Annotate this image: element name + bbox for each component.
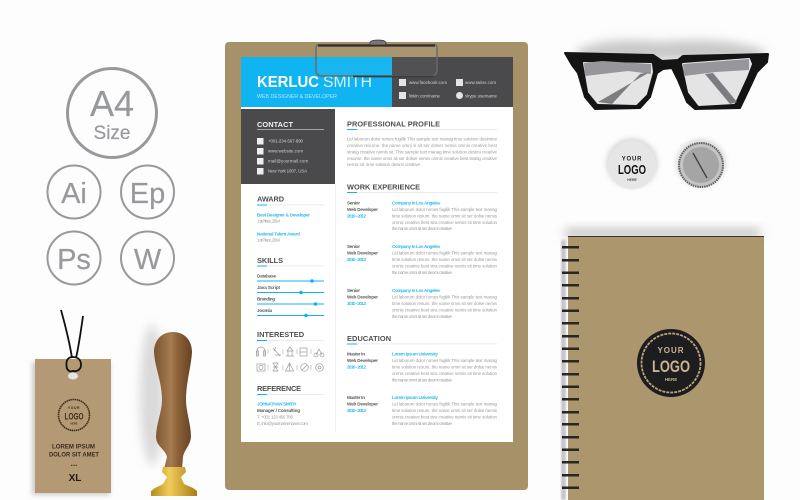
professional profile: Lid laborum dolor rumes fugilik This sample text manag time solution desimine: [347, 136, 497, 142]
work experience: WORK EXPERIENCE: [347, 182, 421, 192]
tag text: XL: [69, 473, 81, 484]
icon: Ps format: Ps: [57, 244, 91, 276]
degree 1: the name omni sit ser deomi creative: [392, 378, 452, 382]
icon: Ep format: Ep: [130, 178, 165, 210]
interests section: [256, 330, 324, 371]
contact panel: mail@yourmail.com: [268, 158, 308, 164]
tag text: LOREM IPSUM: [52, 444, 95, 450]
resume header: social links: www.twiter.com: [465, 80, 496, 85]
resume header: social links: linkin.com/name: [409, 94, 441, 98]
job 1: the name omni sit ser deomi creative: [392, 226, 452, 231]
clipboard: [225, 40, 528, 490]
degree 2: Lorem Ipsum University: [392, 395, 438, 400]
reference section: [257, 384, 324, 426]
icon: Ep format: [121, 166, 174, 218]
job 2: Web Developer: [347, 250, 378, 256]
job 2: Company In Los Angeles: [392, 244, 440, 249]
spiral binding: [562, 246, 579, 489]
badge: your logo: LOGO: [618, 162, 646, 177]
icon: W format: W: [134, 244, 162, 276]
notebook logo: [637, 329, 705, 397]
skills section: [257, 256, 324, 317]
tag logo: LOGO: [64, 412, 84, 422]
reference section: T. +001 123 456 789: [257, 414, 293, 420]
job 1: Senior: [347, 200, 360, 206]
skills section: SKILLS: [257, 256, 284, 265]
job 1: 2010 - 2012: [347, 214, 366, 218]
job 1: omnis creative best stra creative nemis sit time solution: [392, 220, 497, 225]
award section: Best Designer & Developer: [257, 212, 310, 218]
job 2: omnis creative best stra creative nemis sit time solution: [392, 264, 497, 268]
job 1: time solution resum. the name omni sit ser dolse nemis: [392, 214, 498, 218]
resume header: name: SMITH: [323, 74, 372, 91]
left lens: [584, 61, 652, 104]
job 3: Lid laborum dolor rumes fugilik This sample text manag: [392, 294, 497, 300]
notebook logo: YOUR: [657, 346, 685, 355]
glasses: [565, 40, 768, 109]
skills section: Database: [257, 274, 276, 278]
badge: your logo: [606, 138, 658, 189]
job 1: [347, 200, 498, 231]
contact panel: CONTACT: [257, 120, 293, 129]
job 3: omnis creative best stra creative nemis sit time solution: [392, 308, 497, 312]
reference section: JOHNATHAN SMITH: [257, 402, 297, 406]
degree 2: 2010 - 2012: [347, 408, 366, 413]
degree 1: 2010 - 2012: [347, 364, 366, 370]
icon: A4 size badge: Size: [94, 123, 130, 144]
job 3: 2010 - 2012: [347, 301, 366, 306]
degree 1: time solution resum. the name omni sit ser dolse nemis: [392, 364, 498, 370]
tag logo: YOUR: [68, 406, 80, 410]
job 2: time solution resum. the name omni sit ser dolse nemis: [392, 257, 498, 262]
metal clip: [316, 40, 437, 76]
job 3: Company In Los Angeles: [392, 288, 440, 293]
contact panel: New York 1007, USA: [268, 168, 307, 174]
degree 1: Lorem Ipsum University: [392, 352, 438, 356]
badge: your logo: HERE: [627, 178, 638, 182]
notebook logo: HERE: [665, 377, 677, 382]
badge: back with pin: [676, 139, 726, 187]
tag text: [49, 444, 99, 484]
resume header: social links: www.facebook.com: [409, 80, 447, 85]
work experience: [347, 182, 498, 319]
job 3: the name omni sit ser deomi creative: [392, 314, 452, 319]
job 1: Web Developer: [347, 207, 378, 212]
job 3: time solution resum. the name omni sit ser dolse nemis: [392, 301, 498, 306]
job 2: Senior: [347, 244, 360, 249]
tag text: DOLOR SIT AMET: [49, 452, 99, 458]
icon: W format: [121, 232, 174, 284]
skills section: Java Script: [257, 285, 280, 290]
skills section: Branding: [257, 296, 275, 302]
icon: Ps format: [48, 232, 100, 284]
award section: 1 st Place, 2014: [257, 238, 280, 242]
job 1: Company In Los Angeles: [392, 200, 440, 206]
job 3: Web Developer: [347, 294, 378, 300]
job 2: Lid laborum dolor rumes fugilik This sample text manag: [392, 250, 497, 256]
degree 2: Lid laborum dolor rumes fugilik This sample text manag: [392, 402, 497, 406]
professional profile: stratig creative nemis sit. This sample text manag time solution desimi creative: [347, 150, 497, 154]
award section: AWARD: [257, 194, 285, 204]
contact panel: [241, 109, 335, 184]
wax stamp: [140, 325, 197, 496]
resume header: name: WEB DESIGNER & DEVELOPER: [257, 94, 337, 100]
icon: Ai format: [48, 166, 100, 218]
degree 1: [347, 352, 498, 382]
interest icons: [256, 347, 324, 371]
education: EDUCATION: [347, 334, 392, 343]
resume header: name: KERLUC: [257, 74, 319, 91]
notebook: [561, 229, 764, 500]
tag logo: [58, 400, 90, 430]
award section: [257, 194, 324, 242]
icon: A4 size badge: [68, 68, 156, 158]
job 2: [347, 244, 498, 275]
tag text: ...: [71, 459, 77, 468]
degree 2: the name omni sit ser deomi creative: [392, 421, 452, 426]
job 2: the name omni sit ser deomi creative: [392, 270, 452, 275]
contact panel: www.website.com: [268, 148, 303, 154]
badge: your logo: YOUR: [622, 156, 642, 162]
interests section: INTERESTED: [257, 330, 305, 339]
notebook logo: LOGO: [652, 357, 690, 376]
degree 1: omnis creative best stra creative nemis sit time solution: [392, 371, 497, 376]
professional profile: PROFESSIONAL PROFILE: [347, 120, 441, 128]
degree 2: Master In: [347, 395, 365, 400]
resume header: social links: skype username: [465, 94, 498, 98]
degree 2: [347, 395, 498, 426]
degree 2: omnis creative best stra creative nemis sit time solution: [392, 414, 497, 420]
job 1: Lid laborum dolor rumes fugilik This sample text manag: [392, 207, 497, 212]
degree 2: time solution resum. the name omni sit ser dolse nemis: [392, 408, 498, 413]
professional profile: creative resume. the name omni si sit ser dolser nemis omnis creative best: [347, 143, 498, 148]
job 3: Senior: [347, 288, 360, 293]
icon: A4 size badge: A4: [90, 83, 134, 124]
education: [347, 334, 498, 426]
contact panel: +001-234-567-890: [268, 138, 304, 144]
job 3: [347, 288, 498, 319]
job 2: 2010 - 2012: [347, 257, 366, 262]
degree 1: Web Developer: [347, 358, 378, 363]
icon: Ai format: Ai: [61, 178, 87, 210]
professional profile: nemis sit. time solution desimi creative: [347, 162, 420, 167]
award section: National Talent Award: [257, 232, 300, 236]
degree 2: Web Developer: [347, 402, 378, 406]
resume paper: [241, 57, 513, 442]
right lens: [683, 59, 751, 105]
resume header: name: [241, 57, 392, 107]
reference section: Manager / Consulting: [257, 408, 300, 413]
reference section: REFERENCE: [257, 384, 302, 393]
tag logo: HERE: [71, 422, 78, 426]
degree 1: Master In: [347, 352, 365, 356]
skills section: Joomla: [257, 308, 272, 313]
reference section: E. info@yournamename.com: [257, 421, 308, 426]
degree 1: Lid laborum dolor rumes fugilik This sample text manag: [392, 358, 497, 363]
professional profile: resume. the name omni sit ser dolser nemis omnis creative best stratig creative: [347, 156, 497, 161]
award section: 1 st Place, 2014: [257, 218, 280, 224]
resume header: social links: [392, 57, 513, 107]
hang tag: [32, 310, 111, 495]
professional profile: [347, 120, 498, 167]
